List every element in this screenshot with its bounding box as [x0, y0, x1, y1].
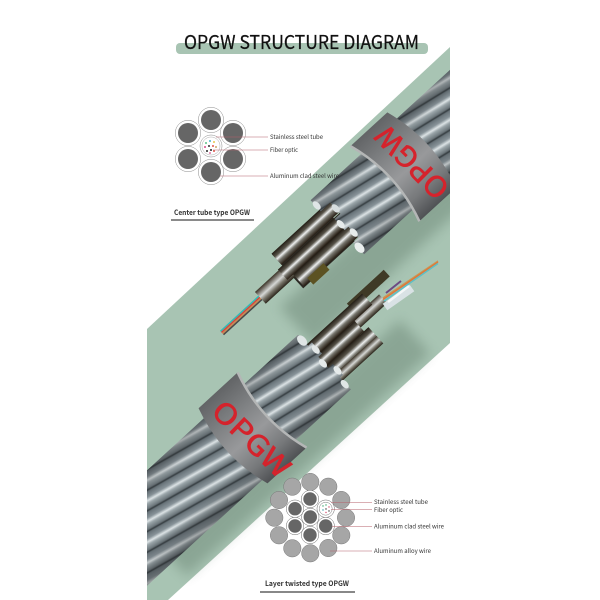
cross-section diagram: center tube type [175, 107, 246, 185]
callouts: center tube type [213, 132, 340, 180]
cross-section diagram: layer twisted type [266, 473, 355, 562]
lower cable: white inner tube and colored fibers [383, 261, 438, 307]
callouts: layer twisted type: Aluminum clad steel wire [374, 522, 445, 530]
upper cable label: OPGW: OPGW [365, 117, 457, 209]
callouts: center tube type: Aluminum clad steel wire [270, 171, 340, 180]
callouts: layer twisted type: Aluminum alloy wire [374, 546, 432, 555]
callouts: layer twisted type: Stainless steel tube [374, 497, 429, 506]
callouts: layer twisted type: Fiber optic [374, 505, 403, 514]
caption: layer twisted type OPGW: Layer twisted type OPGW [265, 579, 350, 589]
green diagonal background band [147, 47, 450, 600]
callouts: center tube type: Fiber optic [270, 145, 298, 154]
callouts: layer twisted type [330, 497, 445, 555]
callouts: center tube type: Stainless steel tube [270, 132, 324, 141]
lower cable: layer twisted type [147, 270, 430, 586]
heading: OPGW STRUCTURE DIAGRAM [184, 28, 419, 55]
lower cable label: OPGW: OPGW [204, 391, 301, 486]
upper cable: center tube type [220, 70, 450, 342]
caption: center tube type OPGW: Center tube type OPGW [174, 208, 251, 218]
